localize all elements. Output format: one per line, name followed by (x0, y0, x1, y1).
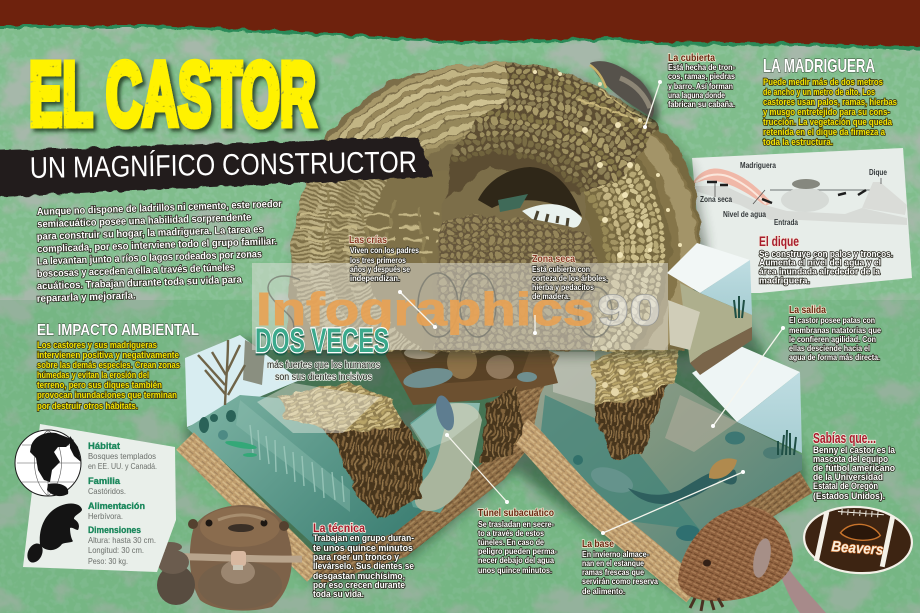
callout: Sabías que: de la Universidad (813, 472, 883, 482)
callout: La base: servirán como reserva (582, 577, 658, 586)
panel: El impacto ambiental: por destruir otros hábitats. (37, 401, 138, 411)
subtitle black band (0, 137, 433, 197)
callout: La salida: La salida (789, 305, 826, 316)
callout: La cubierta: y barro. Así forman (668, 82, 733, 91)
callout: Túnel subacuático: Túnel subacuático (478, 508, 554, 519)
cross-section diagram: Nivel de agua (723, 210, 766, 219)
right water floor (528, 345, 802, 580)
callout: Túnel subacuático: túneles. En caso de (478, 538, 544, 547)
callout: Sabías que (813, 430, 896, 501)
tan edges (185, 441, 316, 573)
panel: fact sheet: Dimensiones (88, 525, 141, 535)
panel: fact sheet: Familia (88, 476, 121, 486)
underwater tunnel (410, 394, 482, 513)
callout: Túnel subacuático (478, 508, 557, 575)
intro text: acuáticos. Trabajan durante toda su vida para (37, 275, 242, 292)
intro text: semiacuático posee una habilidad sorprendente (37, 212, 252, 230)
callout: La salida (789, 305, 881, 362)
panel: fact sheet: Bosques templados (88, 451, 156, 461)
callout: La cubierta: Está hecha de tron- (668, 63, 735, 72)
panel: fact sheet: Altura: hasta 30 cm. (88, 535, 156, 545)
icon: globe (15, 430, 81, 496)
translucent band with watermark: 90 (597, 286, 661, 335)
reeds and plants on left platform (198, 340, 265, 457)
callout: La técnica: llevárselo. Sus dientes se (313, 561, 414, 571)
callout: La técnica: te unos quince minutos (313, 543, 413, 553)
callout: Sabías que: (Estados Unidos). (813, 491, 885, 501)
callout: Túnel subacuático: necer debajo del agua (478, 556, 554, 565)
callout: La técnica: toda su vida. (313, 589, 364, 599)
translucent band with watermark (252, 263, 668, 350)
lower left: radial sticks (288, 178, 441, 354)
callout: Sabías que: de fútbol americano (813, 463, 895, 473)
callout: Las crías: Viven con los padres (350, 246, 419, 255)
cross-section diagram (692, 161, 907, 227)
panel: La madriguera: Puede medir más de dos metros (763, 77, 883, 87)
callout: Zona seca: Zona seca (532, 254, 575, 265)
right stick column (595, 385, 668, 460)
callout: La técnica: Trabajan en grupo duran- (313, 533, 414, 543)
panel: fact sheet: Peso: 30 kg. (88, 556, 128, 566)
left water floor (187, 395, 440, 552)
right rear pane (667, 243, 752, 375)
callout: Zona seca: de madera. (532, 292, 570, 301)
right front pane (692, 345, 800, 422)
callout: La base (582, 539, 658, 596)
panel: La madriguera: y musgo entretejido para su cons- (763, 107, 890, 117)
intro text: repararla y mejorarla. (37, 291, 136, 305)
panel: fact sheet: Herbívora. (88, 511, 123, 521)
central log ends (446, 62, 659, 199)
panel: La madriguera: toda la estructura. (763, 137, 833, 147)
intro text: boscosas y acceden a ella a través de túneles (37, 262, 235, 280)
callout: Zona seca: corteza de los árboles, (532, 274, 608, 283)
nest chamber with beavers (380, 345, 558, 405)
callout: La técnica: La técnica (313, 521, 365, 535)
big beaver, lower left head (148, 505, 302, 611)
panel: diagram and El dique: El dique (759, 233, 799, 249)
panel: La madriguera: castores usan palos, ramas, hierbas (763, 97, 897, 107)
left stick column (300, 393, 427, 520)
panel: diagram and El dique (692, 148, 912, 293)
left glass pane (185, 335, 300, 427)
panel: La madriguera: trucción. La vegetación que queda (763, 117, 893, 127)
football logo: Beavers (831, 538, 884, 559)
panel: El impacto ambiental: intervienen positiva y negativamente (37, 350, 179, 360)
callout: La salida: membranas natatorias que (789, 326, 881, 335)
panel: El impacto ambiental: terreno, pero sus diques también (37, 380, 162, 390)
callout: Sabías que: Estatal de Oregón (813, 481, 878, 491)
top torn brown band (0, 0, 920, 51)
icon: beaver silhouette (24, 503, 82, 565)
left underwater grass (250, 425, 344, 502)
panel: La madriguera (763, 56, 897, 147)
Dos veces heading: son sus dientes incisivos (275, 372, 372, 383)
lodge dome (286, 60, 714, 364)
intro text: complicada, por eso interviene todo el grupo familiar. (37, 236, 277, 255)
callout: La técnica (313, 521, 414, 599)
right side log ends and radial sticks (584, 130, 702, 352)
callout: Las crías: años y después se (350, 265, 410, 274)
cross-section diagram: Dique (869, 168, 887, 177)
panel: La madriguera: LA MADRIGUERA (763, 56, 875, 76)
panel: diagram and El dique: Se construye con palos y troncos. (759, 249, 893, 259)
panel: El impacto ambiental: EL IMPACTO AMBIENTAL (37, 322, 199, 339)
callout: La base: En invierno almace- (582, 550, 649, 559)
intro text: para construir su hogar, la madriguera. La tarea es (37, 224, 264, 243)
panel: fact sheet: Longitud: 30 cm. (88, 545, 144, 555)
callout: La técnica: desgastan muchísimo, (313, 571, 405, 581)
Dos veces heading (255, 322, 389, 383)
panel: fact sheet: Castóridos. (88, 486, 126, 496)
mound below opening (436, 214, 598, 352)
translucent band with watermark: Infographics (256, 283, 594, 335)
icon: beaver family (402, 345, 537, 391)
opening in the dome (478, 167, 582, 228)
upper left: sticks running along the curve (302, 60, 508, 192)
subtitle black band: UN MAGNÍFICO CONSTRUCTOR (30, 146, 417, 185)
callout: La cubierta: La cubierta (668, 53, 715, 64)
panel: diagram and El dique: área inundada alrededor de la (759, 266, 881, 276)
cross-section diagram: Entrada (774, 218, 798, 227)
callout: La cubierta (668, 53, 735, 109)
panel: diagram and El dique: Aumenta el nivel del agua y el (759, 258, 881, 268)
intro text: La levantan junto a ríos o lagos rodeados por zonas (37, 249, 263, 268)
callout: Sabías que: Sabías que... (813, 430, 876, 447)
callout: Sabías que: mascota del equipo (813, 454, 888, 464)
callout: La base: La base (582, 539, 614, 550)
pointer lines (398, 80, 785, 535)
cross-section diagram: Zona seca (700, 195, 732, 204)
callout: Túnel subacuático: to a través de estos (478, 529, 544, 538)
title: EL CASTOR (29, 45, 316, 145)
panel: fact sheet: Hábitat (88, 441, 120, 451)
lodge illustration: base platform (185, 243, 806, 600)
callout: La cubierta: fabrican su cabaña. (668, 100, 735, 109)
callout: La base: de alimento. (582, 587, 625, 596)
panel: fact sheet (15, 424, 176, 572)
callout: La cubierta: una laguna donde (668, 91, 725, 100)
panel: diagram and El dique: madriguera. (759, 276, 810, 286)
callout: La salida: agua de forma más directa. (789, 353, 880, 362)
beaver on roof (590, 61, 659, 125)
cream highlights (533, 70, 682, 258)
callout: La base: nan en el estanque (582, 559, 644, 568)
panel: El impacto ambiental: provocan inundaciones que terminan (37, 390, 177, 400)
brush columns (257, 345, 680, 520)
panel: El impacto ambiental (37, 322, 199, 411)
callout: La técnica: por eso crecen durante (313, 580, 405, 590)
centre stick column (480, 387, 523, 463)
callout: Las crías (349, 235, 419, 283)
callout: Túnel subacuático: peligro pueden perma- (478, 547, 557, 556)
cross-section diagram: Madriguera (740, 161, 776, 170)
callout: Túnel subacuático: Se trasladan en secre- (478, 520, 554, 529)
panel: fact sheet: en EE. UU. y Canadá. (88, 461, 157, 471)
panel: fact sheet: Alimentación (88, 501, 145, 511)
callout: Túnel subacuático: unos quince minutos. (478, 566, 552, 575)
callout: La salida: ellas desciende hacia el (789, 344, 870, 353)
big beaver, lower right (678, 506, 826, 613)
callout: La salida: le confieren agilidad. Con (789, 335, 876, 344)
panel: El impacto ambiental: sobre las demás especies. Crean zonas (37, 360, 180, 370)
panel: El impacto ambiental: Los castores y sus madrigueras (37, 340, 157, 350)
intro text: Aunque no dispone de ladrillos ni cemento, este roedor (37, 199, 282, 218)
callout: La base: ramas frescas que (582, 568, 644, 577)
callout: Zona seca (532, 254, 608, 301)
callout: Las crías: independizan. (350, 274, 400, 283)
callout: Las crías: Las crías (349, 235, 387, 246)
panel: La madriguera: de ancho y un metro de alto. Los (763, 87, 875, 97)
paw (157, 565, 195, 605)
swimming beaver and rocks (573, 430, 796, 541)
callout: Zona seca: Está cubierta con (532, 265, 590, 274)
callout: La técnica: para roer un tronco y (313, 552, 399, 562)
callout: Sabías que: Benny el castor es la (813, 445, 896, 455)
stick held in teeth (148, 556, 302, 559)
callout: Zona seca: hierba y pedacitos (532, 283, 594, 292)
football logo (802, 503, 914, 577)
callout: Las crías: los tres primeros (350, 256, 406, 265)
callout: La cubierta: cos, ramas, piedras (668, 72, 735, 81)
intro text (34, 199, 285, 305)
panel: La madriguera: retenida en el dique da firmeza a (763, 127, 886, 137)
callout: La salida: El castor posee patas con (789, 316, 875, 325)
Dos veces heading: más fuertes que los humanos (267, 360, 380, 371)
Dos veces heading: DOS VECES (255, 322, 389, 360)
panel: El impacto ambiental: húmedas y evitan la erosión del (37, 370, 149, 380)
